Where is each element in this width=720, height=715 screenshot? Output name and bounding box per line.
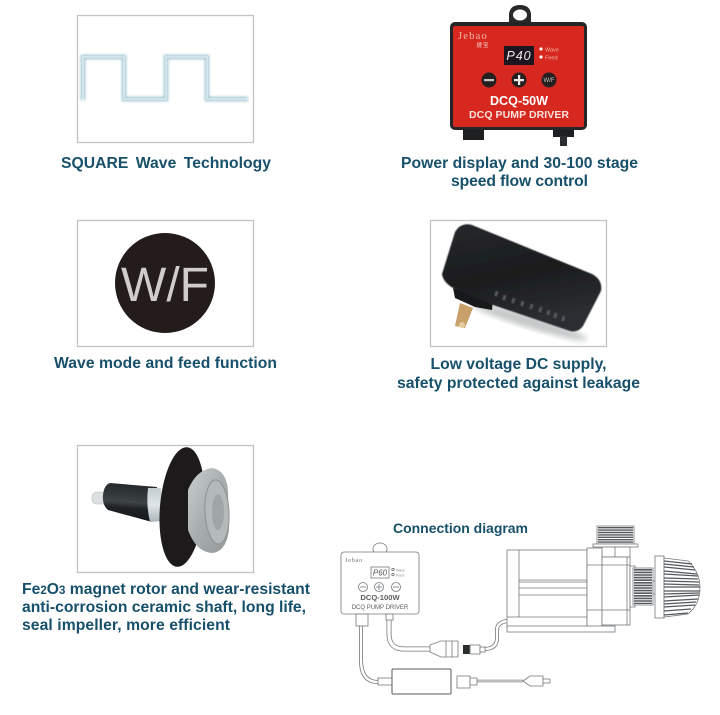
panel: power adapter: [430, 220, 606, 346]
panel: square wave: [78, 16, 254, 142]
connection diagram: [341, 526, 700, 694]
icon: W/F button: W/F: [121, 259, 209, 312]
icon: DCQ-50W pump driver: 捷宝: [476, 41, 490, 49]
mode indicators: [539, 47, 559, 62]
icon: DCQ-50W pump driver: DCQ PUMP DRIVER: [469, 109, 569, 121]
caption: rotor: [22, 581, 311, 634]
logo: Jebao: [458, 31, 488, 42]
caption: rotor: Fe2O3 magnet rotor and wear-resistant: [22, 581, 311, 598]
connector pair: [430, 641, 485, 657]
caption: power display: Power display and 30-100 stage: [401, 155, 638, 172]
power supply: [378, 669, 550, 694]
caption: rotor: seal impeller, more efficient: [22, 617, 231, 634]
panel: rotor: [78, 445, 254, 572]
diagram driver: Feed: [396, 574, 404, 578]
heading: square wave technology: SQUARE Wave Technology: [61, 155, 271, 172]
caption: power display: [401, 155, 638, 190]
icon: DCQ-50W pump driver: [450, 5, 587, 146]
icon: W/F button: [115, 233, 215, 333]
caption: low voltage: [397, 356, 640, 392]
strainer: [655, 556, 700, 618]
icon: magnet rotor and impeller: [92, 445, 231, 569]
icon: power adapter: [442, 224, 601, 345]
pump: [507, 526, 700, 632]
square wave signal: [83, 57, 248, 100]
caption: power display: speed flow control: [451, 173, 588, 190]
panel: wave and feed: [78, 220, 254, 346]
cables: [361, 614, 523, 682]
caption: rotor: anti-corrosion ceramic shaft, long life,: [22, 599, 306, 616]
caption: low voltage: safety protected against leakage: [397, 375, 640, 392]
buttons: [482, 72, 556, 88]
mode indicators: Wave: [545, 48, 559, 54]
diagram driver: [341, 543, 419, 626]
diagram driver: DCQ PUMP DRIVER: [352, 605, 409, 611]
heading: connection diagram: Connection diagram: [393, 520, 528, 536]
diagram driver: P60: [373, 568, 388, 578]
caption: low voltage: Low voltage DC supply,: [430, 356, 606, 373]
diagram driver: Jebao: [345, 557, 363, 564]
mode indicators: Feed: [545, 56, 558, 62]
power display: P40: [506, 49, 532, 63]
power display: [504, 46, 534, 65]
buttons: W/F: [544, 78, 555, 84]
diagram driver: DCQ-100W: [360, 593, 400, 602]
model label: DCQ-50W: [490, 94, 548, 108]
caption: wave mode: Wave mode and feed function: [54, 355, 277, 372]
diagram driver: Wave: [396, 568, 405, 572]
